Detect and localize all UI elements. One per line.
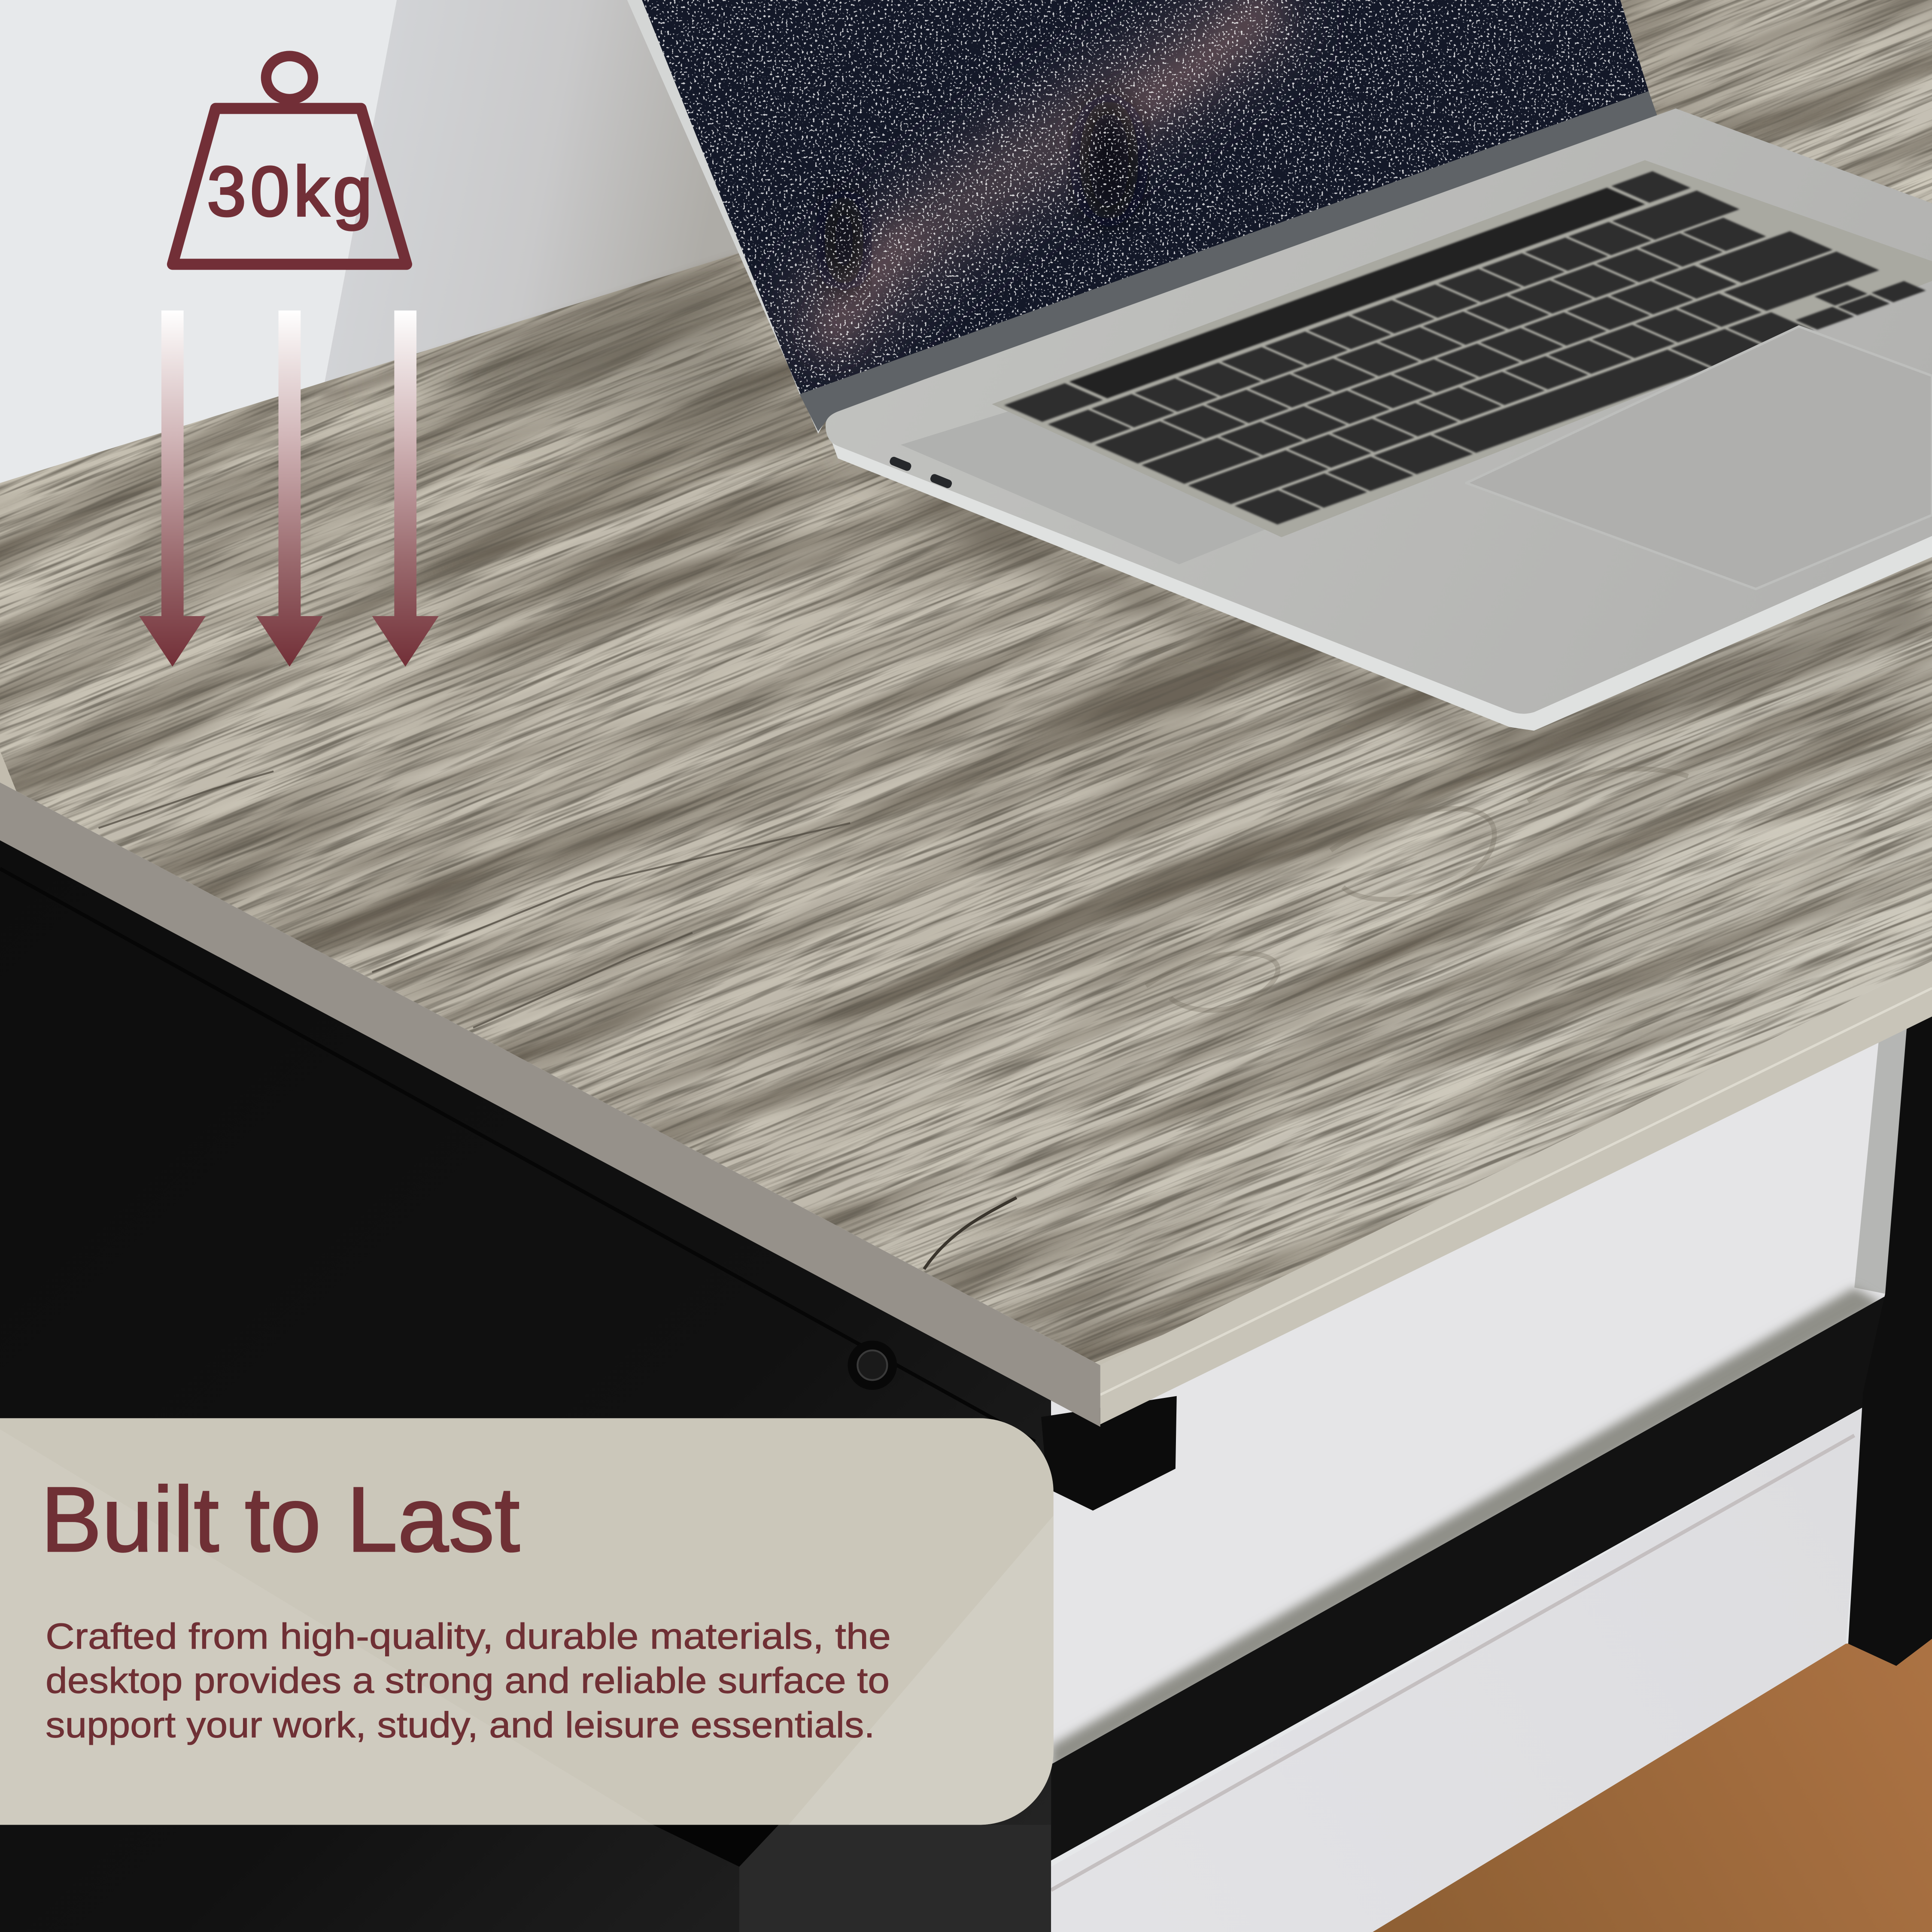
- laptop screen: [616, 0, 1676, 407]
- rivet: [848, 1340, 897, 1390]
- desk front right edge: [1100, 961, 1932, 1425]
- floor: [1373, 1639, 1932, 1932]
- arrow 3: [372, 310, 439, 667]
- keyboard keys: [1004, 171, 1926, 525]
- black table leg: [1848, 1008, 1932, 1666]
- hinge strip: [800, 91, 1657, 431]
- corner bracket: [1041, 1396, 1177, 1510]
- screen bezel: [627, 0, 823, 434]
- laptop base edge: [828, 431, 1932, 731]
- text panel: [0, 1418, 1054, 1825]
- laptop shadow: [370, 265, 1932, 770]
- body text: Crafted from high-quality, durable materials, the: [46, 1616, 891, 1656]
- fabric drawer: [0, 813, 1051, 1932]
- speaker grille: [901, 412, 1270, 564]
- desk top surface: [0, 0, 1932, 1365]
- body text: desktop provides a strong and reliable surface to: [46, 1660, 890, 1701]
- lower wall: [1051, 973, 1932, 1848]
- weight body: [173, 109, 407, 264]
- laptop base deck: [826, 109, 1932, 714]
- downward arrows: [139, 310, 439, 667]
- wall background: [0, 0, 1932, 517]
- body text: [46, 1616, 891, 1745]
- heading: Built to Last: [41, 1467, 520, 1571]
- arrow 2: [256, 310, 323, 667]
- trackpad: [1466, 327, 1932, 589]
- body text: support your work, study, and leisure essentials.: [46, 1704, 875, 1745]
- arrow 1: [139, 310, 206, 667]
- baseboard: [1051, 1402, 1873, 1932]
- laptop: [616, 0, 1932, 731]
- weight label: 30kg: [207, 152, 372, 231]
- usb ports: [889, 456, 953, 489]
- black crossbar: [1051, 1296, 1885, 1861]
- back edge of desk: [323, 261, 739, 397]
- weight icon: [173, 56, 407, 264]
- desk front left edge: [0, 782, 1100, 1427]
- weight ring: [266, 56, 313, 99]
- keyboard well: [992, 160, 1932, 537]
